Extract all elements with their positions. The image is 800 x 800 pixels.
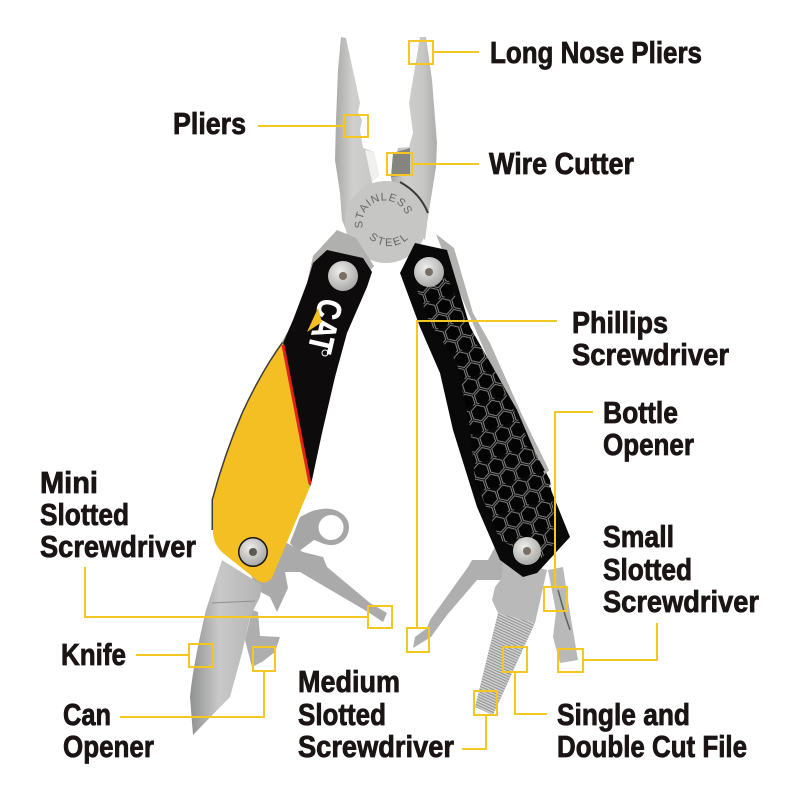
pivot text: STAINLESS: [354, 192, 412, 228]
callout: long nose pliers: Long Nose Pliers: [490, 35, 702, 70]
callout: pliers: Pliers: [173, 106, 246, 141]
tool: knife: [190, 560, 262, 735]
hex grip: [417, 277, 557, 560]
red stripe: [283, 345, 310, 484]
callout: phillips screwdriver: [407, 305, 729, 652]
callout: medium slotted screwdriver: Slotted: [298, 697, 386, 732]
top screw: [414, 257, 444, 287]
callout: phillips screwdriver: Screwdriver: [572, 337, 729, 372]
callout: small slotted screwdriver: Small: [603, 519, 674, 554]
callout: long nose pliers: [409, 35, 702, 70]
callout: mini slotted screwdriver: Slotted: [40, 497, 129, 532]
callout: pliers: [173, 106, 368, 141]
pivot text: STEEL: [370, 233, 408, 246]
black side plate: [283, 250, 372, 487]
tool: can opener: [245, 610, 280, 667]
CAT logo: CAT: [300, 295, 349, 357]
tool: phillips screwdriver: [413, 547, 503, 648]
top screw: [328, 261, 358, 291]
bevel highlight: [365, 150, 379, 182]
callout: knife: Knife: [61, 637, 126, 672]
callout: small slotted screwdriver: Screwdriver: [603, 584, 759, 619]
callout: knife: [61, 637, 213, 672]
callout: small slotted screwdriver: [558, 519, 759, 672]
left handle: [213, 230, 374, 582]
bottom screw: [238, 537, 268, 567]
metal collar and serrated edge: [436, 234, 549, 480]
callout: mini slotted screwdriver: Screwdriver: [40, 529, 196, 564]
callout: wire cutter: [387, 146, 634, 181]
callout: medium slotted screwdriver: [298, 664, 497, 764]
callout: mini slotted screwdriver: Mini: [40, 465, 98, 500]
callout: can opener: Opener: [63, 729, 154, 764]
wire cutter blade: [391, 148, 410, 177]
callout: medium slotted screwdriver: Medium: [298, 664, 400, 699]
right handle: [400, 234, 570, 577]
callout: medium slotted screwdriver: Screwdriver: [298, 729, 454, 764]
metal collar and spine: [280, 230, 374, 345]
callout: wire cutter: Wire Cutter: [489, 146, 634, 181]
callout: can opener: [63, 647, 275, 764]
pivot disc: [345, 181, 427, 263]
black plate: [400, 243, 570, 577]
left jaw: [335, 37, 395, 240]
callout: bottle opener: Bottle: [603, 395, 678, 430]
callout: single and double cut file: Single and: [557, 697, 690, 732]
tool: file: [475, 560, 547, 715]
callout: single and double cut file: Double Cut File: [557, 729, 747, 764]
pivot shadow arc: [400, 182, 428, 213]
callout: small slotted screwdriver: Slotted: [603, 552, 692, 587]
pivot text: [354, 192, 412, 246]
callout: mini slotted screwdriver: [40, 465, 392, 628]
right jaw: [391, 37, 437, 240]
callout: single and double cut file: [503, 647, 747, 764]
callout: bottle opener: [544, 395, 694, 611]
tool: small slotted screwdriver and bottle opener: [548, 567, 578, 663]
bottom screw: [513, 537, 541, 565]
callout: bottle opener: Opener: [603, 427, 694, 462]
callout: can opener: Can: [63, 697, 111, 732]
tool: ring and medium slotted screwdriver arm: [250, 509, 387, 622]
callout: phillips screwdriver: Phillips: [572, 305, 668, 340]
grip edge: [213, 343, 283, 530]
yellow panel: [213, 343, 310, 582]
pliers: [335, 37, 437, 263]
